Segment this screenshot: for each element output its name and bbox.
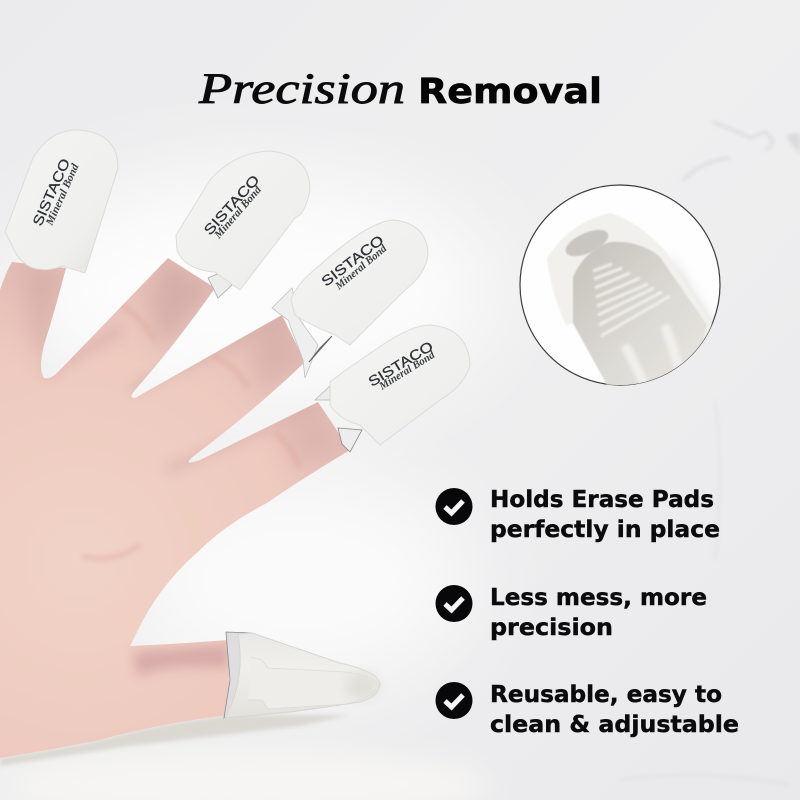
- hand shadow: [0, 715, 350, 766]
- cap: middle finger: [291, 220, 428, 345]
- check icon: [436, 682, 472, 719]
- bullet: less mess: Less mess, more: [490, 585, 707, 611]
- title: [198, 66, 602, 113]
- hand shape: [0, 258, 350, 758]
- bullet: reusable: clean & adjustable: [490, 712, 739, 738]
- bullet: holds erase pads: [436, 487, 720, 543]
- bullet: reusable: [436, 682, 739, 738]
- cap: index finger: [330, 325, 470, 445]
- bullet: holds erase pads: perfectly in place: [490, 517, 720, 543]
- bullet: reusable: Reusable, easy to: [490, 682, 722, 708]
- cap: pinky: Mineral Bond: [43, 162, 82, 228]
- ribbed interior: [573, 242, 707, 395]
- cap opening: [565, 230, 609, 257]
- cap: index finger: SISTACO: [365, 338, 436, 390]
- bullet: holds erase pads: Holds Erase Pads: [490, 487, 714, 513]
- check icon: [436, 488, 472, 525]
- finger and palm shading: [20, 262, 348, 676]
- bullet: less mess: [436, 585, 707, 641]
- cap: pinky: SISTACO: [29, 156, 73, 228]
- bullet: less mess: precision: [490, 615, 613, 641]
- title: Removal: [418, 72, 602, 112]
- check icon: [436, 585, 472, 622]
- hand: [0, 258, 350, 766]
- cap: ring finger: Mineral Bond: [212, 184, 264, 242]
- cap: index finger: Mineral Bond: [376, 349, 437, 393]
- cap: ring finger: [176, 151, 310, 290]
- title: Precision: [198, 66, 405, 113]
- cap outer shell: [547, 213, 712, 390]
- cap drop shadow: [672, 260, 714, 356]
- cap: pinky: [5, 130, 118, 273]
- cap: middle finger: SISTACO: [318, 232, 387, 289]
- cap: middle finger: Mineral Bond: [332, 242, 390, 293]
- cap: ring finger: SISTACO: [200, 171, 263, 238]
- inset circle: cap underside: [520, 185, 725, 395]
- cap: thumb: [225, 633, 380, 718]
- foil wraps: [208, 272, 362, 718]
